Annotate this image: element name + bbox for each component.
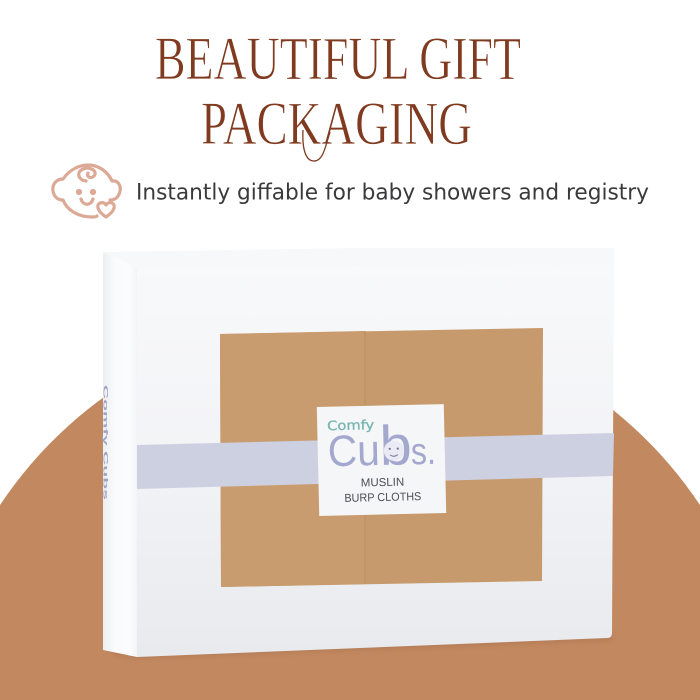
logo: Cubs: b xyxy=(379,413,412,477)
icon: baby face with heart xyxy=(53,165,120,217)
title K flourish xyxy=(303,130,330,161)
label text line 2: BURP CLOTHS xyxy=(344,491,422,505)
label text line 1: MUSLIN xyxy=(361,477,404,489)
box left side xyxy=(103,252,137,657)
title line 2: PACKAGING xyxy=(201,91,472,158)
logo: Cubs: s. xyxy=(410,431,436,473)
title line 1: BEAUTIFUL GIFT xyxy=(155,26,521,93)
lavender band xyxy=(137,433,614,489)
logo: Cubs xyxy=(327,413,436,478)
subtitle: Instantly giffable for baby showers and registry xyxy=(136,180,649,206)
product label xyxy=(317,404,446,516)
gift box xyxy=(102,248,614,658)
box shadow xyxy=(112,634,612,658)
background circle xyxy=(0,318,700,700)
side print: Comfy Cubs xyxy=(102,385,109,500)
window: folded cloths xyxy=(220,328,543,587)
logo: Cubs: Cu xyxy=(327,426,380,476)
box front xyxy=(137,265,614,657)
box top side xyxy=(103,248,614,269)
title xyxy=(155,26,521,158)
logo: Comfy: Comfy xyxy=(327,418,375,434)
